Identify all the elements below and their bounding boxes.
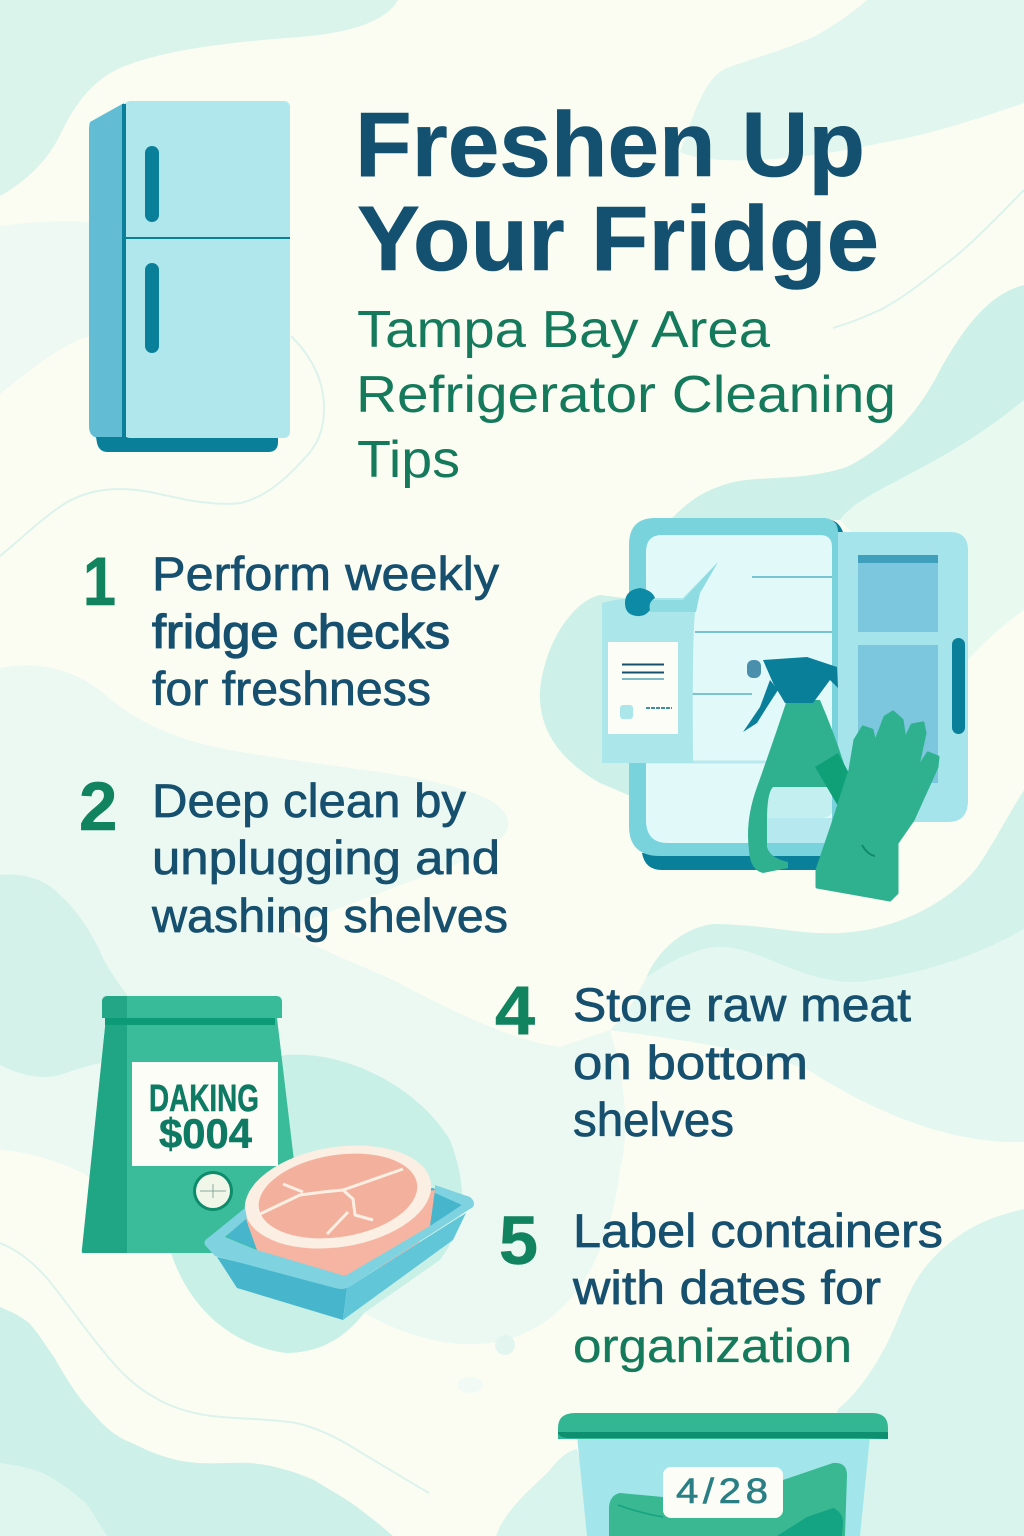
- product label: DAKING: [149, 1078, 259, 1120]
- illustration: cleaning the fridge: [602, 518, 968, 900]
- tip 1: fridge checks: [152, 605, 450, 658]
- title: Your Fridge: [357, 188, 879, 290]
- tip 2: 2: [79, 768, 117, 845]
- subtitle: Tampa Bay Area: [357, 301, 770, 359]
- tip 1: 1: [83, 543, 116, 620]
- icon: refrigerator: [89, 101, 290, 452]
- tip 1: [83, 543, 500, 715]
- tip 4: shelves: [573, 1093, 734, 1146]
- subtitle: Refrigerator Cleaning: [356, 366, 896, 424]
- tip 5: organization: [573, 1319, 852, 1372]
- open carton with label: [602, 562, 718, 763]
- baking soda box: [82, 996, 305, 1253]
- tray interior: [227, 1188, 462, 1285]
- tip 2: Deep clean by: [152, 774, 467, 827]
- tip 4: 4: [495, 972, 535, 1049]
- subtitle: Tips: [357, 431, 460, 489]
- title: Freshen Up: [355, 94, 865, 196]
- meat: [237, 1133, 439, 1276]
- tip 1: Perform weekly: [152, 547, 500, 600]
- illustration: baking soda and raw meat: [82, 996, 474, 1320]
- tip 4: Store raw meat: [573, 978, 911, 1031]
- date label: [663, 1467, 783, 1518]
- title: [355, 94, 879, 290]
- subtitle: [356, 301, 896, 489]
- tip 1: for freshness: [152, 662, 431, 715]
- illustration: labelled container: [558, 1413, 888, 1536]
- tip 2: [79, 768, 508, 942]
- spray bottle: [743, 657, 850, 873]
- tray: [204, 1185, 474, 1320]
- fridge door: [835, 532, 968, 822]
- tip 5: [499, 1202, 943, 1372]
- tip 2: unplugging and: [152, 831, 500, 884]
- tip 5: with dates for: [572, 1261, 881, 1314]
- date label: 4/28: [676, 1471, 768, 1510]
- tip 4: on bottom: [573, 1036, 808, 1089]
- fridge body: [629, 518, 850, 870]
- tip 5: 5: [499, 1202, 538, 1279]
- tip 5: Label containers: [573, 1204, 943, 1257]
- tip 2: washing shelves: [151, 889, 508, 942]
- glove: [817, 712, 938, 900]
- tip 4: [495, 972, 911, 1146]
- product label: $004: [159, 1110, 253, 1157]
- product label: [132, 1062, 278, 1166]
